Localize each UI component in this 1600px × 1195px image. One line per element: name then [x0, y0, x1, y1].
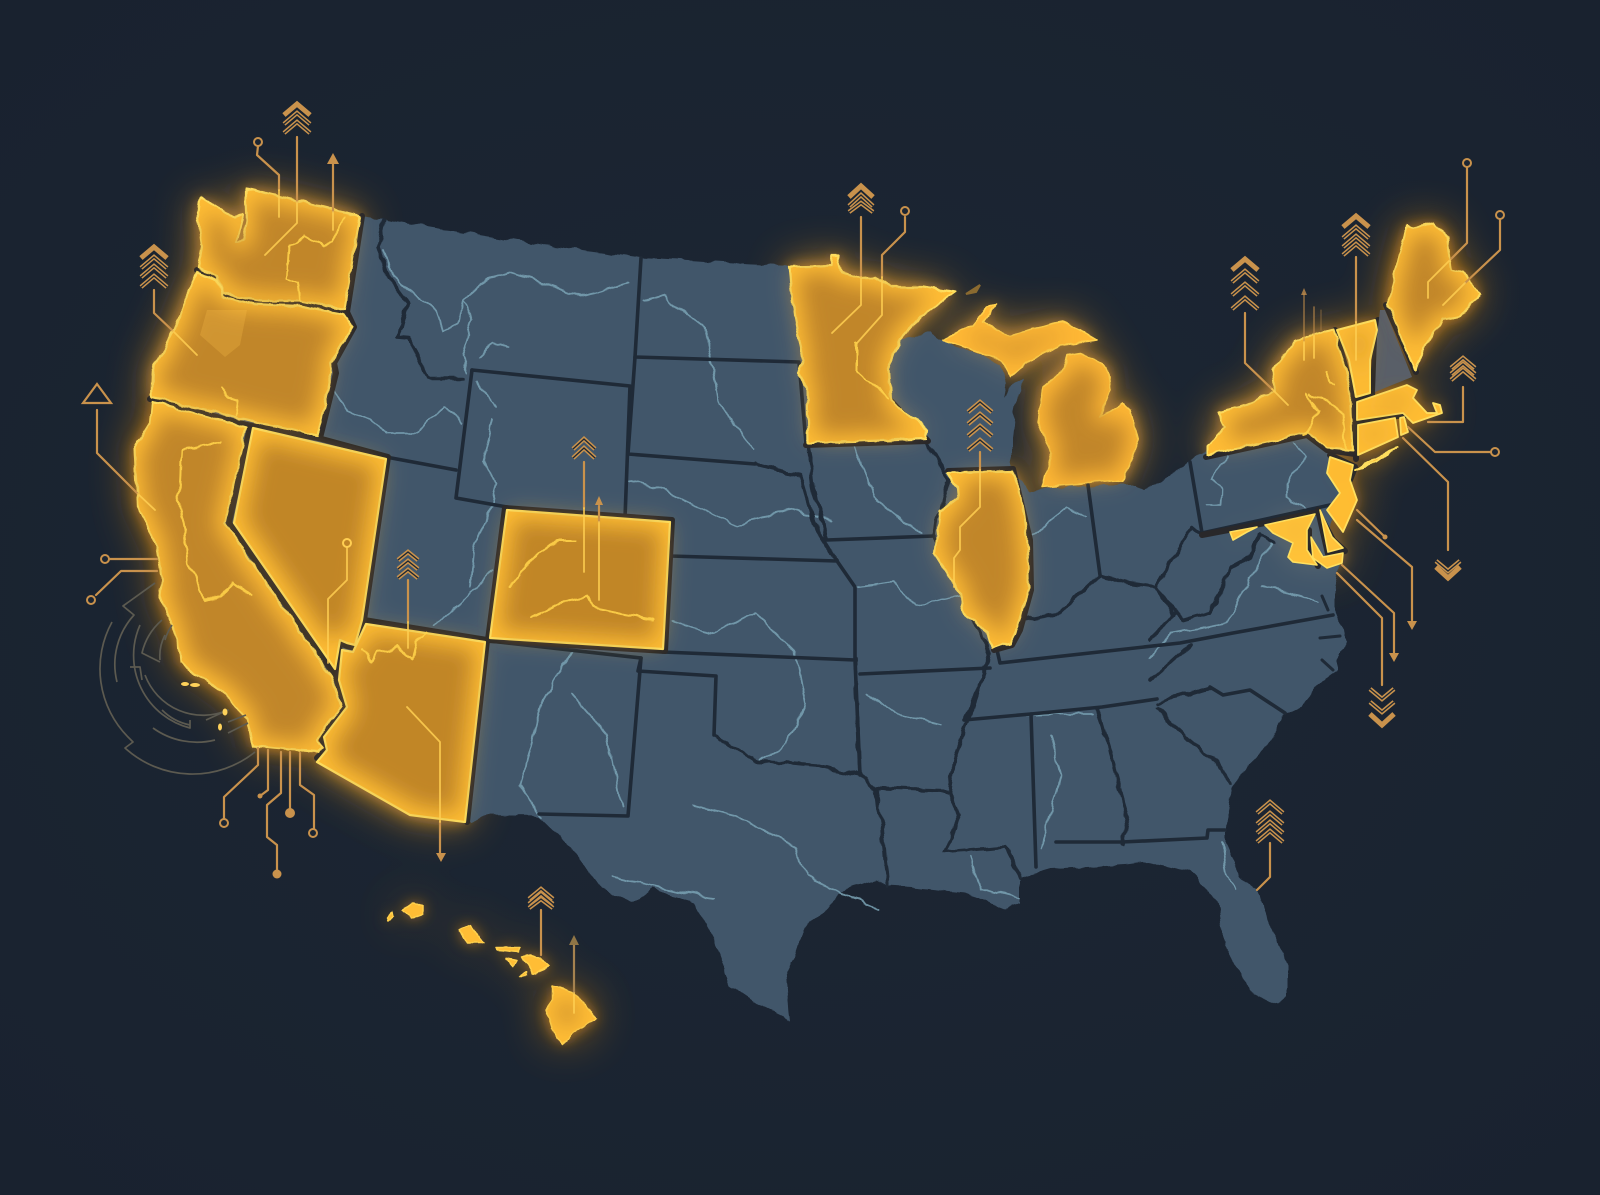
chevrons: Colorado [573, 439, 595, 458]
connector end circles [87, 138, 1504, 837]
state: colorado [490, 510, 670, 649]
state: new jersey [1327, 457, 1357, 532]
state: minnesota [789, 255, 955, 443]
Minnesota connectors [860, 217, 862, 277]
triangle marker [83, 384, 111, 403]
annotation lines inside highlighted states [138, 190, 1465, 1013]
circuit maze rings [100, 583, 255, 774]
Hawaii connector [540, 910, 542, 955]
Wisconsin connector [979, 452, 981, 470]
connector filled dots and arrowheads [258, 153, 1417, 945]
rivers inside highlighted states [178, 218, 1347, 663]
Massachusetts connectors [1428, 387, 1463, 422]
state: massachusetts [1357, 385, 1442, 423]
coastal inlets [1320, 596, 1340, 670]
chevron stacks, inner dark line [141, 104, 1475, 908]
California connectors [97, 410, 138, 494]
Channel Islands [181, 682, 228, 730]
mid-Atlantic connectors [1357, 510, 1385, 537]
state: michigan [943, 305, 1138, 487]
state: arizona [317, 624, 485, 822]
rivers on grey states [333, 250, 1317, 908]
Oregon connector [154, 290, 173, 331]
river state borders on grey states [378, 220, 1273, 886]
Florida connector [1257, 843, 1270, 890]
solid lead chevrons [141, 104, 1460, 725]
chevrons: New York [1232, 259, 1258, 309]
state: nevada [234, 428, 386, 669]
dark borders between highlighted states [150, 216, 1416, 822]
Colorado connector [583, 462, 585, 508]
state: new york [1208, 330, 1397, 470]
chevrons: Florida [1257, 802, 1283, 842]
chevrons: Utah [398, 552, 418, 578]
chevrons: Massachusetts [1451, 358, 1475, 380]
annotation lines [96, 137, 1500, 993]
state: oregon [152, 272, 352, 436]
chevrons: Minnesota [849, 186, 873, 212]
chevrons: Virginia coast, pointing down [1370, 689, 1394, 725]
Utah connector [407, 580, 409, 622]
Maine connectors [1450, 168, 1467, 260]
chevrons: Vermont [1343, 216, 1369, 255]
state: maine [1388, 223, 1480, 370]
map land: contiguous states [200, 216, 1347, 1020]
Arizona connector [439, 822, 441, 854]
Oregon lighter patch [200, 310, 247, 357]
New York connectors [1245, 313, 1272, 389]
state: california [135, 402, 341, 752]
state: washington [198, 188, 360, 309]
Michigan island [966, 285, 980, 294]
state: maryland and delaware [1230, 510, 1343, 568]
state: hawaii [387, 903, 597, 1044]
chevrons: New Jersey coast, pointing down [1436, 561, 1460, 578]
chevrons: Hawaii [529, 889, 553, 908]
warm haze on land around highlighted states [152, 188, 1397, 822]
orange glow behind highlighted states [135, 188, 1480, 1044]
state: connecticut and rhode island [1358, 417, 1408, 455]
chevrons: Wisconsin [968, 402, 992, 450]
chevron stacks, outer stroke [141, 104, 1475, 908]
chevrons: Oregon [141, 247, 167, 287]
straight state borders on grey states [386, 258, 1333, 867]
state: illinois [935, 471, 1029, 648]
Washington connectors [257, 146, 279, 190]
state: vermont [1337, 320, 1377, 397]
chevrons: Washington [284, 104, 310, 133]
state: new hampshire [1375, 310, 1412, 392]
